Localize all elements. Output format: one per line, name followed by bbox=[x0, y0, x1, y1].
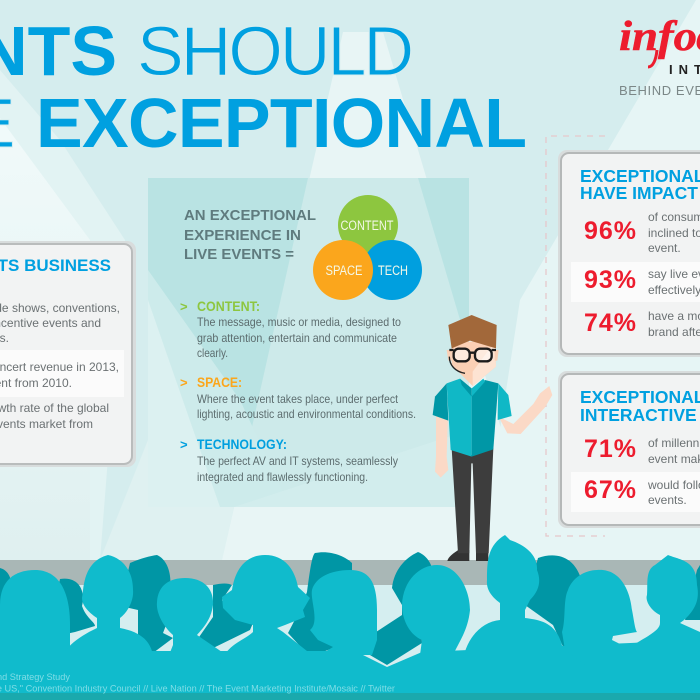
title line 1: SHOULD bbox=[137, 12, 414, 90]
ears bbox=[447, 350, 499, 361]
statistic descriptions bbox=[648, 210, 700, 339]
panel heading bbox=[580, 387, 700, 425]
panel body text bbox=[0, 301, 120, 431]
sources bbox=[0, 672, 395, 694]
panel heading: AN EXCEPTIONAL bbox=[184, 207, 316, 224]
title line 2: EXCEPTIONAL bbox=[36, 84, 527, 162]
technology item bbox=[180, 437, 398, 484]
statistics bbox=[584, 435, 636, 504]
venn diagram: CONTENT bbox=[340, 218, 394, 233]
panel heading bbox=[580, 166, 700, 203]
statistic descriptions: event. bbox=[648, 241, 681, 255]
technology item: The perfect AV and IT systems, seamlessly bbox=[197, 454, 398, 468]
hair bbox=[448, 315, 497, 348]
presenter bbox=[433, 315, 552, 561]
statistic descriptions bbox=[647, 436, 700, 507]
face bbox=[452, 342, 496, 386]
logo wordmark: info bbox=[619, 14, 697, 60]
sleeves bbox=[433, 383, 448, 421]
statistics: 74% bbox=[584, 309, 636, 337]
panel: exceptional experience bbox=[148, 178, 469, 507]
audience bbox=[0, 535, 700, 693]
space item bbox=[180, 375, 416, 421]
content item: clearly. bbox=[197, 346, 228, 360]
space item: Where the event takes place, under perfect bbox=[197, 392, 399, 406]
statistics bbox=[584, 217, 636, 337]
shirt bbox=[447, 379, 472, 457]
headset bbox=[449, 357, 465, 373]
panel heading bbox=[184, 207, 316, 263]
technology item: integrated and flawlessly functioning. bbox=[197, 470, 368, 484]
panel heading: INTERACTIVE bbox=[580, 405, 697, 425]
logo bbox=[619, 14, 700, 98]
logo swash bbox=[648, 50, 657, 67]
right arm bbox=[499, 386, 552, 434]
panel heading: EXPERIENCE IN bbox=[184, 227, 301, 244]
statistics: 96% bbox=[584, 217, 636, 245]
panel heading: LIVE EVENTS = bbox=[184, 246, 294, 263]
panel: events interactive bbox=[558, 371, 700, 528]
left arm bbox=[435, 413, 448, 478]
space item: lighting, acoustic and environmental conditions. bbox=[197, 407, 416, 421]
panel: events business bbox=[0, 241, 136, 467]
back row bbox=[0, 552, 700, 665]
content item bbox=[180, 299, 401, 360]
content item: grab attention, entertain and communicate bbox=[197, 331, 397, 345]
shoes bbox=[447, 550, 488, 561]
panel: events have impact bbox=[558, 150, 700, 357]
space item: SPACE: bbox=[197, 375, 242, 390]
title bbox=[0, 12, 527, 162]
statistics: 71% bbox=[584, 435, 636, 463]
statistics: 67% bbox=[584, 476, 636, 504]
content item: The message, music or media, designed to bbox=[197, 315, 401, 329]
content item: > bbox=[180, 299, 188, 314]
front row bbox=[0, 535, 700, 693]
statistic descriptions: events. bbox=[648, 493, 687, 507]
technology item: TECHNOLOGY: bbox=[197, 437, 287, 452]
trousers bbox=[452, 448, 493, 553]
venn diagram: TECH bbox=[378, 263, 408, 278]
space item: > bbox=[180, 375, 188, 390]
dashed frame bbox=[546, 136, 605, 536]
glasses bbox=[449, 349, 496, 361]
footer strip bbox=[0, 693, 700, 700]
venn diagram: SPACE bbox=[326, 263, 362, 278]
statistics: 93% bbox=[584, 266, 636, 294]
stage bbox=[0, 560, 700, 665]
panel heading: HAVE IMPACT bbox=[580, 183, 698, 203]
content item: CONTENT: bbox=[197, 299, 260, 314]
venn diagram bbox=[313, 195, 422, 300]
technology item: > bbox=[180, 437, 188, 452]
